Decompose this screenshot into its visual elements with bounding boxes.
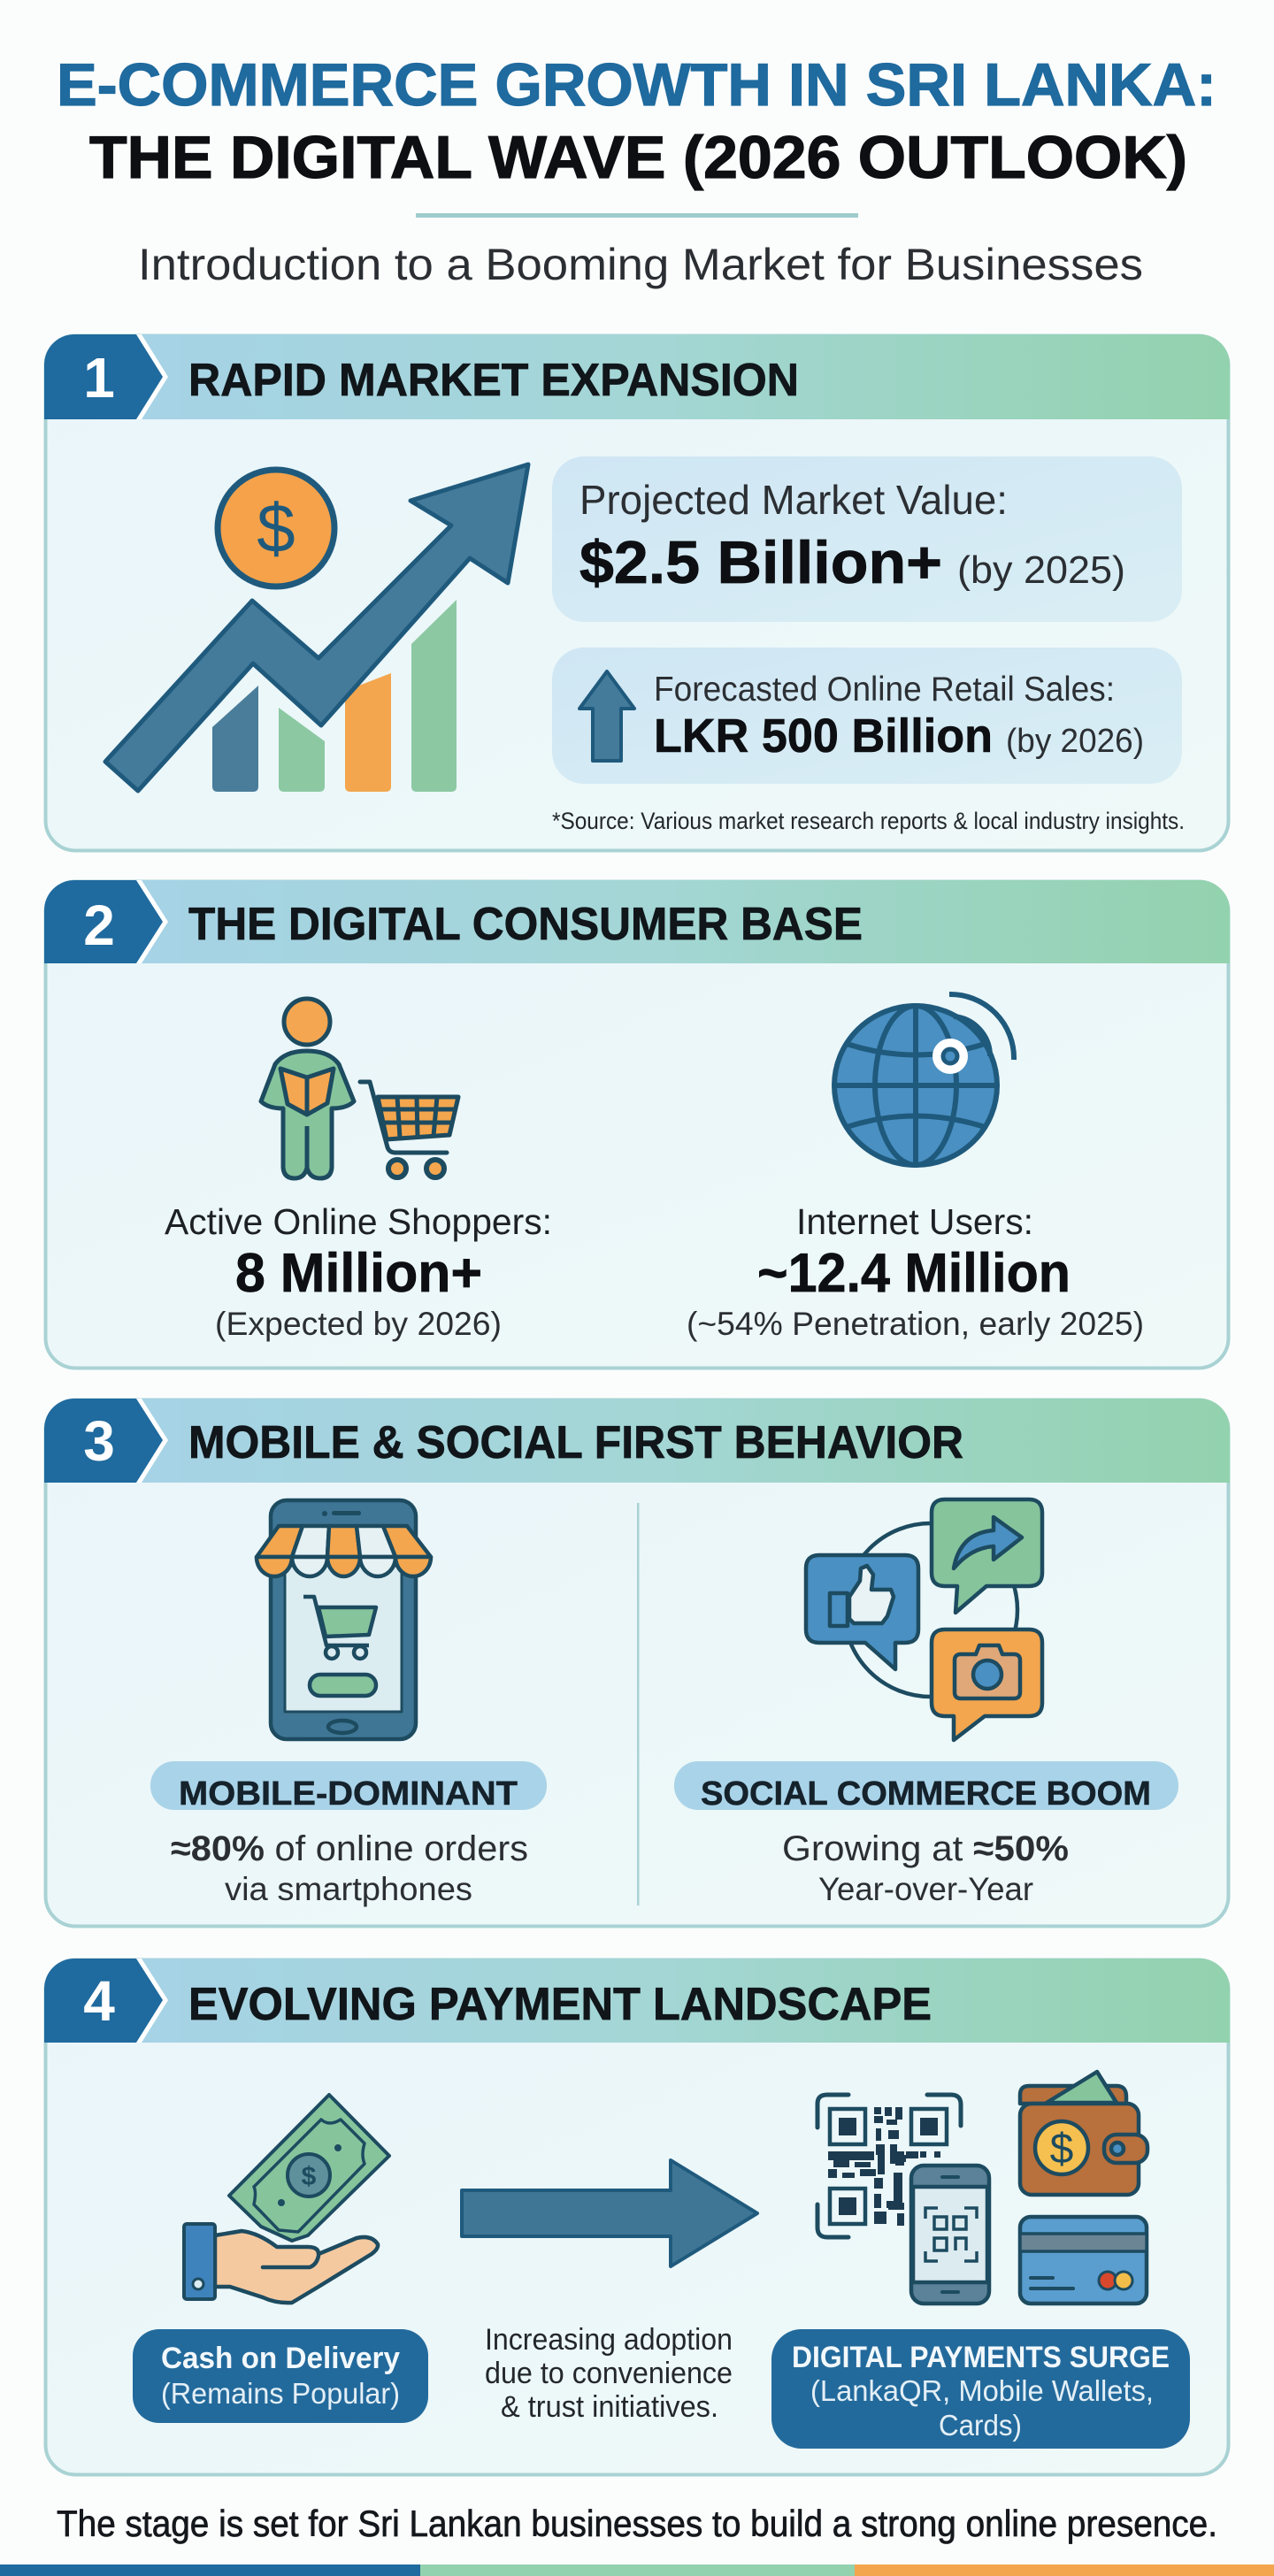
stat: internet users: Internet Users: [796, 1201, 1033, 1242]
callout: mobile-dominant: ≈80% of online orders [171, 1829, 528, 1868]
header: section 3: 3 [83, 1409, 115, 1473]
stat: active online shoppers: 8 Million+ [235, 1243, 482, 1304]
card: forecasted online retail sales: (by 2026) [1006, 723, 1144, 760]
card: projected market value: $2.5 Billion+ [579, 529, 942, 596]
header: section 2: THE DIGITAL CONSUMER BASE [188, 899, 863, 950]
stat: internet users [687, 1201, 1144, 1342]
title [57, 51, 1216, 191]
icon: mobile storefront [257, 1500, 431, 1739]
subtitle: Introduction to a Booming Market for Businesses [138, 240, 1143, 289]
card: projected market value: Projected Market Value: [579, 477, 1008, 523]
callout: social commerce boom [674, 1761, 1178, 1907]
icon: cash in hand [184, 2095, 389, 2303]
header: section 3: MOBILE & SOCIAL FIRST BEHAVIOR [188, 1417, 963, 1468]
header: section 4: EVOLVING PAYMENT LANDSCAPE [188, 1979, 932, 2030]
icon: credit card [1020, 2217, 1147, 2304]
panel: digital consumer base [44, 880, 1230, 1368]
icon: dollar coin: $ [257, 489, 295, 567]
callout: mobile-dominant [150, 1761, 547, 1907]
callout: digital payments surge: DIGITAL PAYMENTS SURGE [792, 2341, 1170, 2374]
card: forecasted online retail sales [552, 648, 1182, 784]
header: section 1: 1 [83, 346, 115, 410]
icon: wallet: $ [1050, 2126, 1073, 2173]
title: THE DIGITAL WAVE (2026 OUTLOOK) [89, 124, 1187, 191]
stat: active online shoppers: Active Online Shoppers: [165, 1201, 552, 1242]
callout: cash on delivery [133, 2329, 428, 2423]
callout: mobile-dominant: MOBILE-DOMINANT [179, 1775, 518, 1813]
panel: rapid market expansion [44, 334, 1230, 851]
icon: social bubbles [806, 1499, 1042, 1740]
stat: internet users: (~54% Penetration, early 2025) [687, 1306, 1144, 1342]
stat: active online shoppers [165, 1201, 552, 1342]
icon: QR code [817, 2095, 961, 2237]
footer color bar [0, 2564, 1274, 2576]
icon: shopper with book [261, 999, 354, 1178]
icon: cash in hand: $ [302, 2162, 317, 2191]
arrow: to digital payments [462, 2160, 757, 2266]
callout: digital payments surge: (LankaQR, Mobile Wallets, [810, 2374, 1154, 2407]
text: adoption note: due to convenience [485, 2357, 733, 2390]
source note: *Source: Various market research reports & local industry insights. [552, 808, 1185, 834]
header: section 4 [44, 1959, 1230, 2043]
callout: social commerce boom: Year-over-Year [818, 1871, 1033, 1907]
icon: wallet [1020, 2072, 1147, 2195]
header: section 4: 4 [83, 1969, 115, 2033]
bar chart [212, 600, 457, 792]
text: adoption note [485, 2323, 733, 2424]
header: section 1: RAPID MARKET EXPANSION [188, 355, 799, 406]
icon: growth arrow [105, 464, 528, 791]
card: forecasted online retail sales: LKR 500 Billion [654, 709, 993, 763]
card: projected market value [552, 456, 1182, 622]
header: section 1 [44, 334, 1230, 419]
card: forecasted online retail sales: Forecasted Online Retail Sales: [654, 671, 1115, 709]
header: section 2 [44, 880, 1230, 963]
header: section 3 [44, 1399, 1230, 1483]
callout: social commerce boom: Growing at ≈50% [782, 1829, 1069, 1868]
panel: evolving payment landscape [44, 1959, 1230, 2475]
callout: digital payments surge [771, 2329, 1190, 2449]
stat: active online shoppers: (Expected by 2026) [215, 1306, 502, 1342]
icon: dollar coin [218, 470, 334, 586]
text: adoption note: Increasing adoption [485, 2323, 733, 2357]
icon: globe with wifi [834, 994, 1014, 1165]
callout: cash on delivery: Cash on Delivery [161, 2342, 400, 2375]
callout: cash on delivery: (Remains Popular) [161, 2377, 400, 2410]
text: adoption note: & trust initiatives. [501, 2390, 718, 2424]
header: section 2: 2 [83, 893, 115, 957]
icon: up arrow [579, 671, 634, 761]
title: E-COMMERCE GROWTH IN SRI LANKA: [57, 51, 1216, 119]
callout: digital payments surge: Cards) [939, 2409, 1022, 2442]
panel: mobile and social first [44, 1399, 1230, 1927]
icon: shopping cart [360, 1082, 458, 1177]
callout: mobile-dominant: via smartphones [225, 1871, 472, 1907]
card: projected market value: (by 2025) [957, 548, 1125, 592]
callout: social commerce boom: SOCIAL COMMERCE BOOM [701, 1775, 1151, 1813]
stat: internet users: ~12.4 Million [757, 1243, 1071, 1304]
icon: phone scanning QR [911, 2166, 989, 2304]
